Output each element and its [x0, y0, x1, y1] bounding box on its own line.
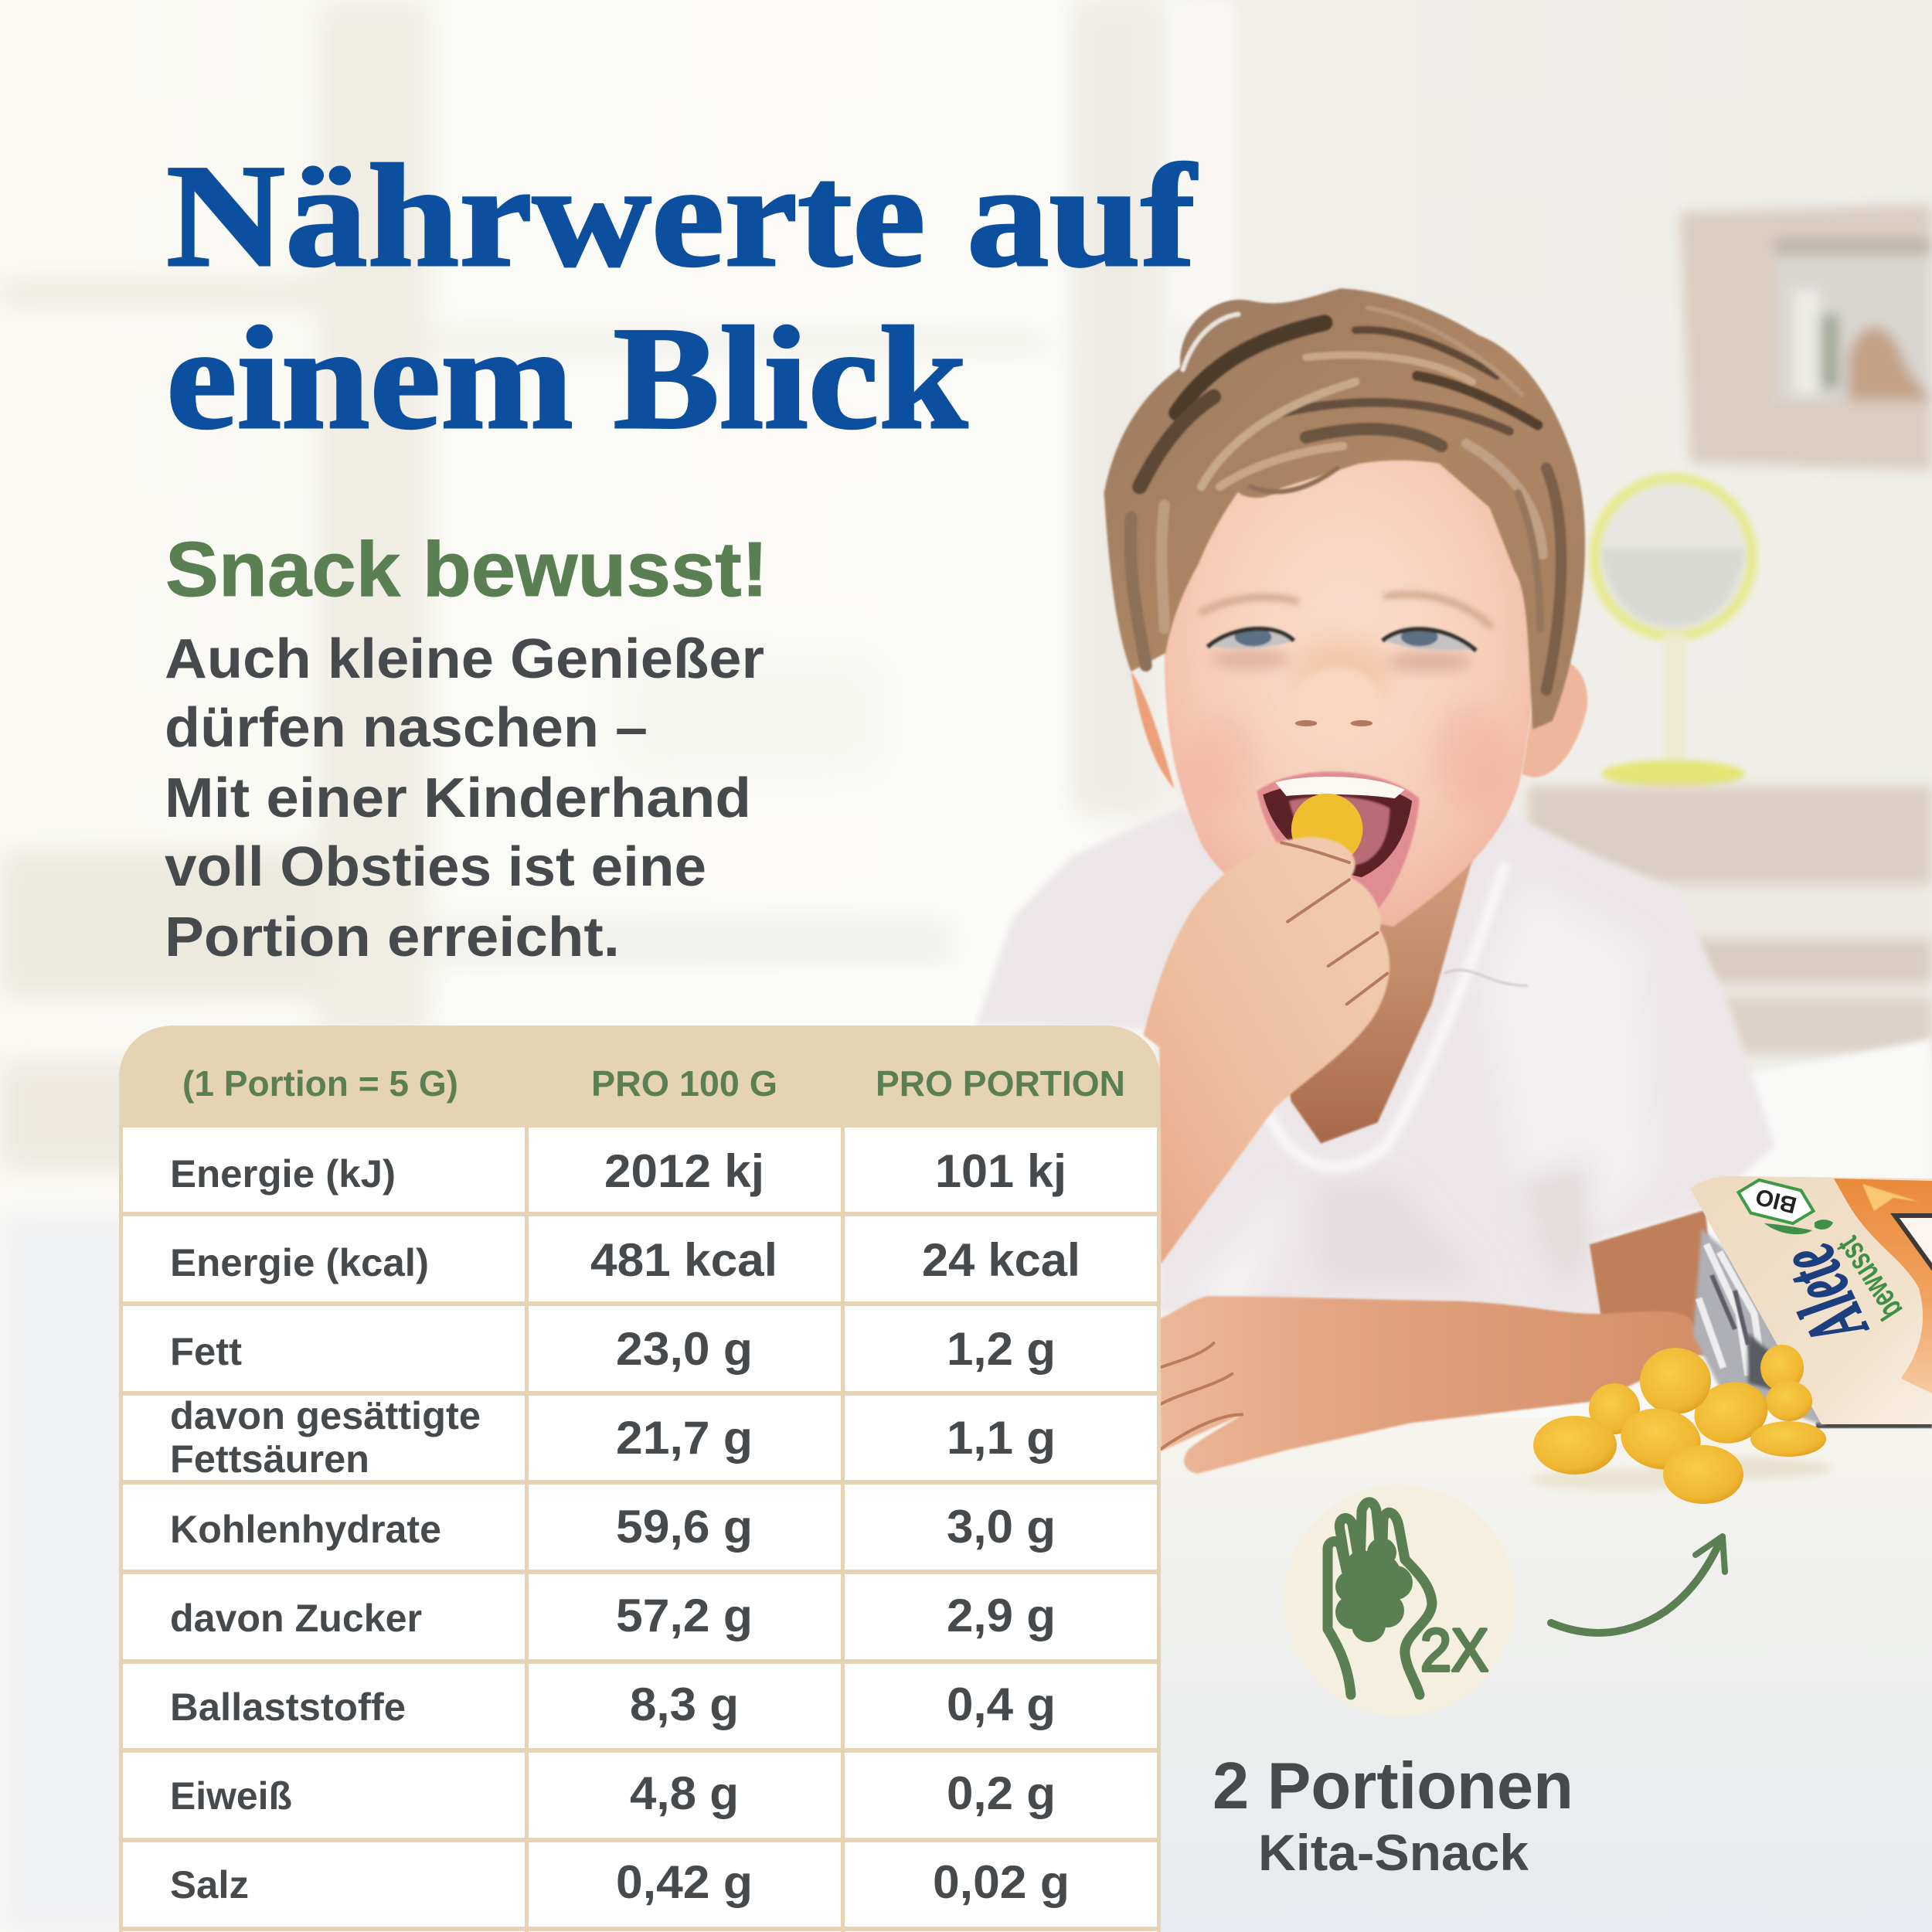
snack bag: [1690, 1176, 1932, 1428]
table header labels: (1 Portion = 5 G): [182, 1063, 458, 1104]
values per portion: 0,02 g: [933, 1856, 1070, 1908]
mouth: [1257, 771, 1420, 914]
values per 100 g: 21,7 g: [616, 1412, 753, 1464]
values per 100 g: 59,6 g: [616, 1501, 753, 1553]
bag organic seal: [1734, 1176, 1818, 1227]
boy's neck: [1244, 815, 1485, 1144]
table header labels: PRO PORTION: [876, 1063, 1125, 1104]
row labels: Energie (kcal): [170, 1241, 429, 1284]
values per portion: 0,4 g: [947, 1679, 1056, 1730]
title: [166, 135, 1198, 460]
nose: [1293, 668, 1381, 736]
arrow pointing to snacks: [1551, 1536, 1725, 1633]
intro paragraph: voll Obsties ist eine: [165, 836, 706, 898]
bag peach leaf: [1862, 1184, 1919, 1211]
values per 100 g: 23,0 g: [616, 1323, 753, 1375]
row labels: Fett: [170, 1330, 242, 1373]
portions caption: 2 Portionen: [1213, 1750, 1573, 1823]
intro paragraph: Portion erreicht.: [165, 906, 620, 968]
values per 100 g: 8,3 g: [630, 1679, 739, 1730]
boy's resting arm and hand: [1159, 1296, 1706, 1474]
cheek blush: [1185, 634, 1509, 811]
panel: nutrition table: [119, 1026, 1161, 1932]
bag front: [1690, 1176, 1932, 1424]
intro paragraph: Mit einer Kinderhand: [165, 767, 751, 829]
values per 100 g: 481 kcal: [590, 1234, 777, 1286]
portions caption: Kita-Snack: [1258, 1824, 1529, 1881]
row labels: Eiweiß: [170, 1774, 292, 1818]
row labels: Kohlenhydrate: [170, 1508, 441, 1551]
table header band: [119, 1026, 1160, 1128]
table header labels: PRO 100 G: [591, 1063, 777, 1104]
bag organic seal: BIO: [1753, 1183, 1799, 1218]
bag window: [1895, 1216, 1932, 1271]
eyes: [1208, 628, 1476, 651]
row labels: davon Zucker: [170, 1597, 422, 1640]
white bed sheet: [1159, 1039, 1932, 1932]
row labels: Energie (kJ): [170, 1152, 396, 1196]
boy's T-shirt: [976, 807, 1774, 1318]
values per 100 g: [590, 1145, 777, 1908]
row labels: Salz: [170, 1863, 249, 1906]
table header labels: [182, 1063, 1125, 1104]
values per portion: 1,1 g: [947, 1412, 1056, 1464]
background shelf: [1679, 205, 1932, 471]
snack in mouth: [1291, 794, 1362, 865]
row labels: davon gesättigte: [170, 1394, 481, 1437]
background dresser: [1528, 786, 1932, 1055]
boy's upper arm: [1590, 1210, 1720, 1355]
icon: hand with snacks in cream circle: [1284, 1485, 1515, 1716]
bag orange panel: [1834, 1179, 1932, 1393]
values per 100 g: 57,2 g: [616, 1590, 753, 1641]
portions caption: [1213, 1750, 1573, 1881]
boy's face: [1158, 431, 1536, 927]
eye shadows: [1211, 649, 1471, 673]
values per portion: 24 kcal: [922, 1234, 1080, 1286]
intro paragraph: dürfen naschen –: [165, 697, 648, 759]
photo: smiling boy eating snack: [976, 288, 1774, 1474]
values per portion: 3,0 g: [947, 1501, 1056, 1553]
bag brand: Alete: [1760, 1232, 1886, 1360]
bag subbrand: bewusst: [1828, 1230, 1910, 1326]
values per portion: 1,2 g: [947, 1323, 1056, 1375]
row labels: Ballaststoffe: [170, 1685, 406, 1729]
bag leaf: [1764, 1219, 1833, 1234]
pile of yellow snacks: [1530, 1345, 1832, 1504]
boy's hair: [1104, 288, 1585, 730]
boy's ears: [1131, 660, 1587, 788]
bag inner foil: [1693, 1229, 1825, 1424]
values per portion: 2,9 g: [947, 1590, 1056, 1641]
boy's raised hand: [1144, 837, 1389, 1264]
table body: [119, 1113, 1160, 1932]
values per 100 g: 0,42 g: [616, 1856, 753, 1908]
title: Nährwerte auf: [166, 135, 1198, 298]
intro paragraph: [165, 628, 764, 968]
values per portion: 101 kj: [935, 1145, 1066, 1197]
row labels: Fettsäuren: [170, 1437, 369, 1481]
values per portion: 0,2 g: [947, 1767, 1056, 1819]
background mirror ring: [1594, 478, 1752, 787]
multiplier label: 2X: [1420, 1616, 1488, 1684]
eyebrows: [1202, 594, 1491, 626]
values per 100 g: 2012 kj: [604, 1145, 764, 1197]
bag shadow line: [1816, 1422, 1932, 1428]
values per 100 g: 4,8 g: [630, 1767, 739, 1819]
title: einem Blick: [166, 298, 968, 460]
values per portion: [922, 1145, 1080, 1908]
intro paragraph: Auch kleine Genießer: [165, 628, 764, 690]
row labels: [170, 1152, 481, 1906]
subheading: Snack bewusst!: [165, 526, 768, 613]
